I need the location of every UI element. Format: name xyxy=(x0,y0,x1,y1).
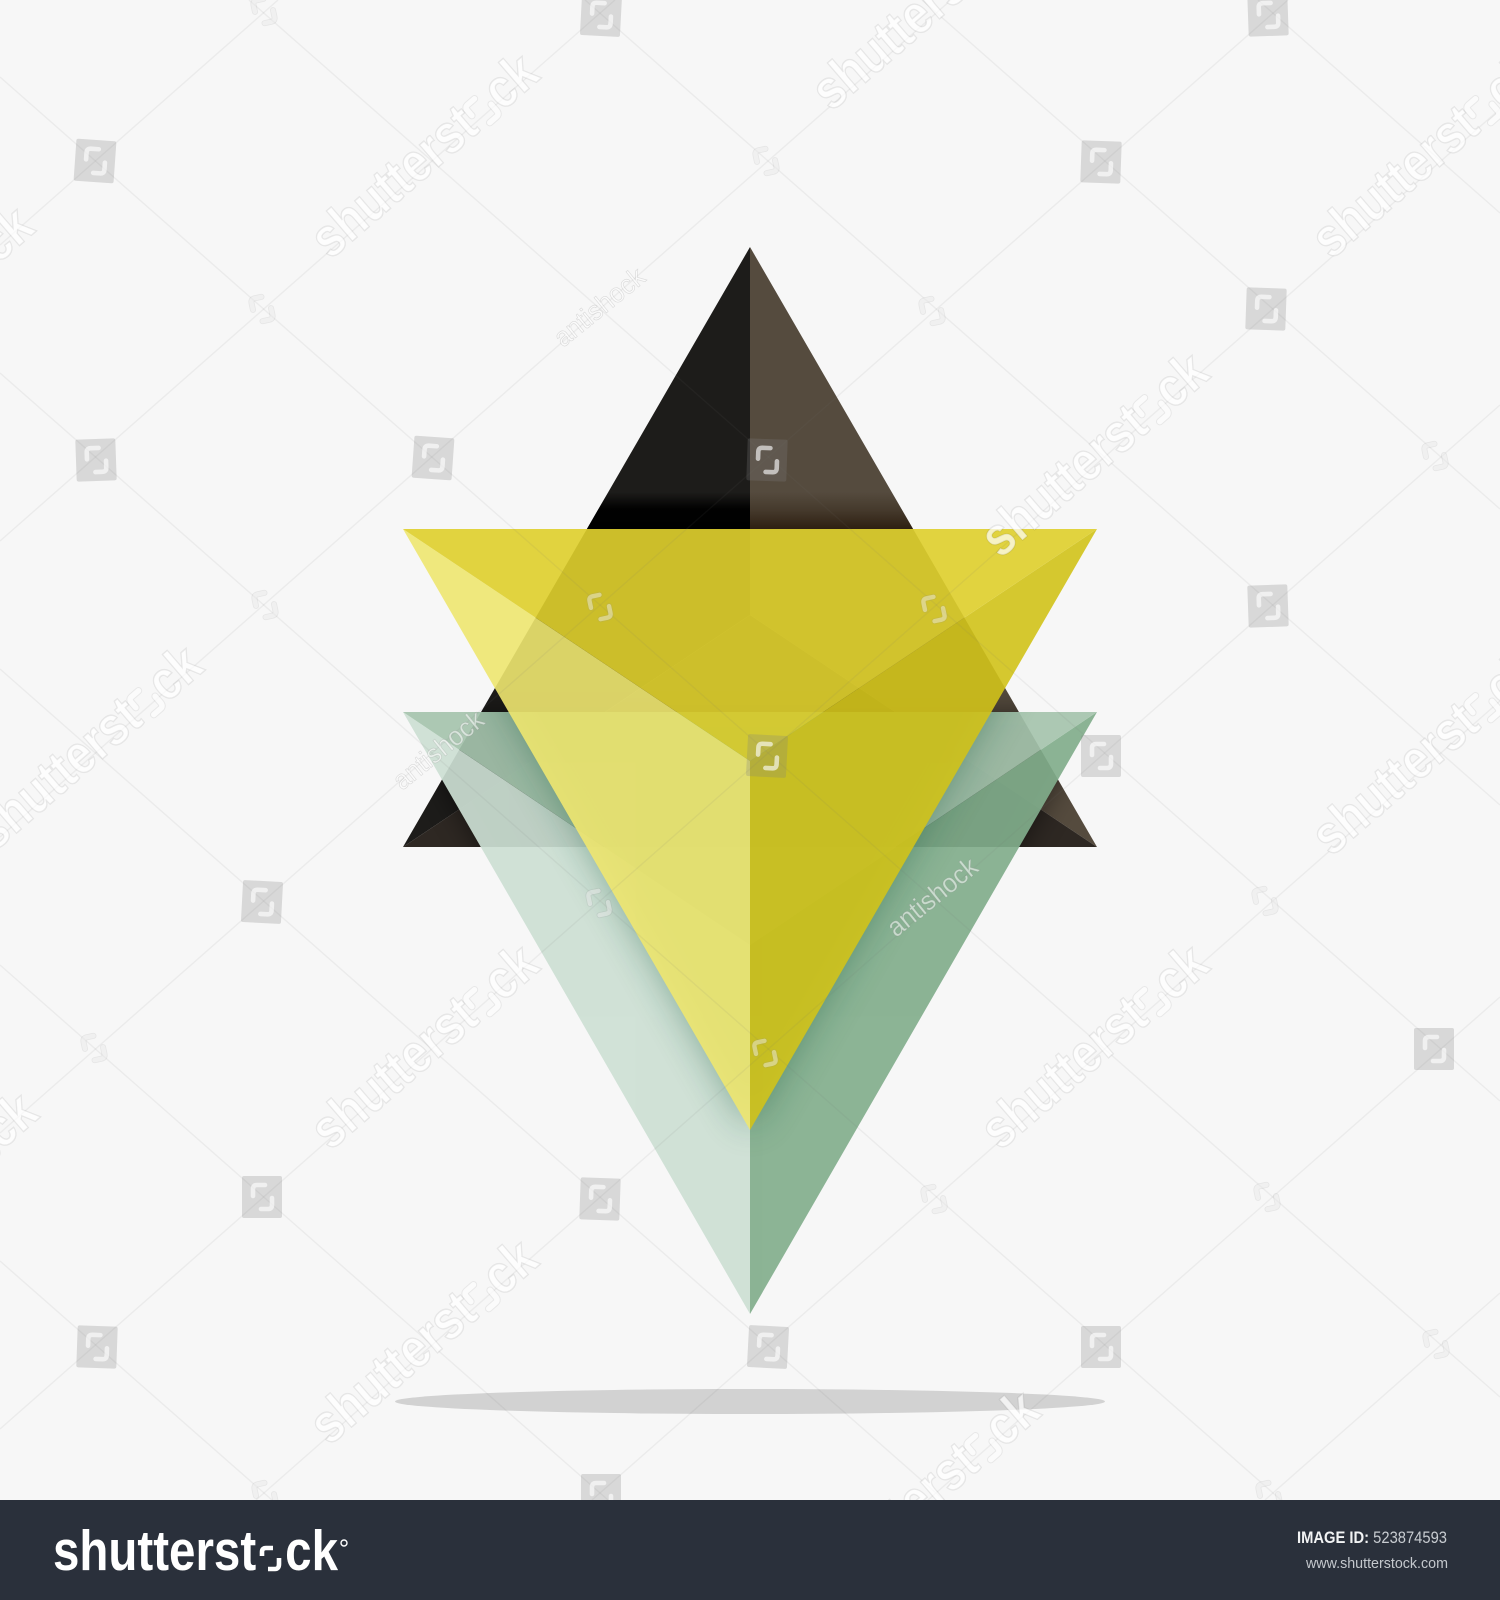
watermark: shutterstock wordmarks: shutterstock xyxy=(968,931,1220,1160)
watermark: shutterstock wordmarks: shutterstock xyxy=(298,40,550,269)
watermark: shutterstock wordmarks: shutterstock xyxy=(298,931,550,1160)
watermark: shutterstock wordmarks: shutterstock xyxy=(968,339,1220,568)
footer logo wordmark: shutterstock xyxy=(53,1519,338,1583)
watermark: antishock credits: antishock xyxy=(881,851,984,943)
watermark: shutterstock wordmarks: shutterstock xyxy=(297,1226,549,1455)
black upward triangle xyxy=(403,247,1097,847)
green downward triangle xyxy=(403,712,1097,1314)
watermark: antishock credits: antishock xyxy=(548,261,651,353)
watermark: shutterstock wordmarks: shutterstock xyxy=(799,1377,1051,1600)
image id: IMAGE ID: 523874593 xyxy=(1297,1529,1447,1547)
yellow downward triangle xyxy=(403,529,1097,1130)
floor shadow ellipse xyxy=(395,1389,1105,1414)
footer band xyxy=(0,1500,1500,1600)
watermark: antishock credits: antishock xyxy=(387,704,490,796)
website url: www.shutterstock.com xyxy=(1305,1555,1448,1572)
watermark: antishock credits xyxy=(387,261,984,943)
